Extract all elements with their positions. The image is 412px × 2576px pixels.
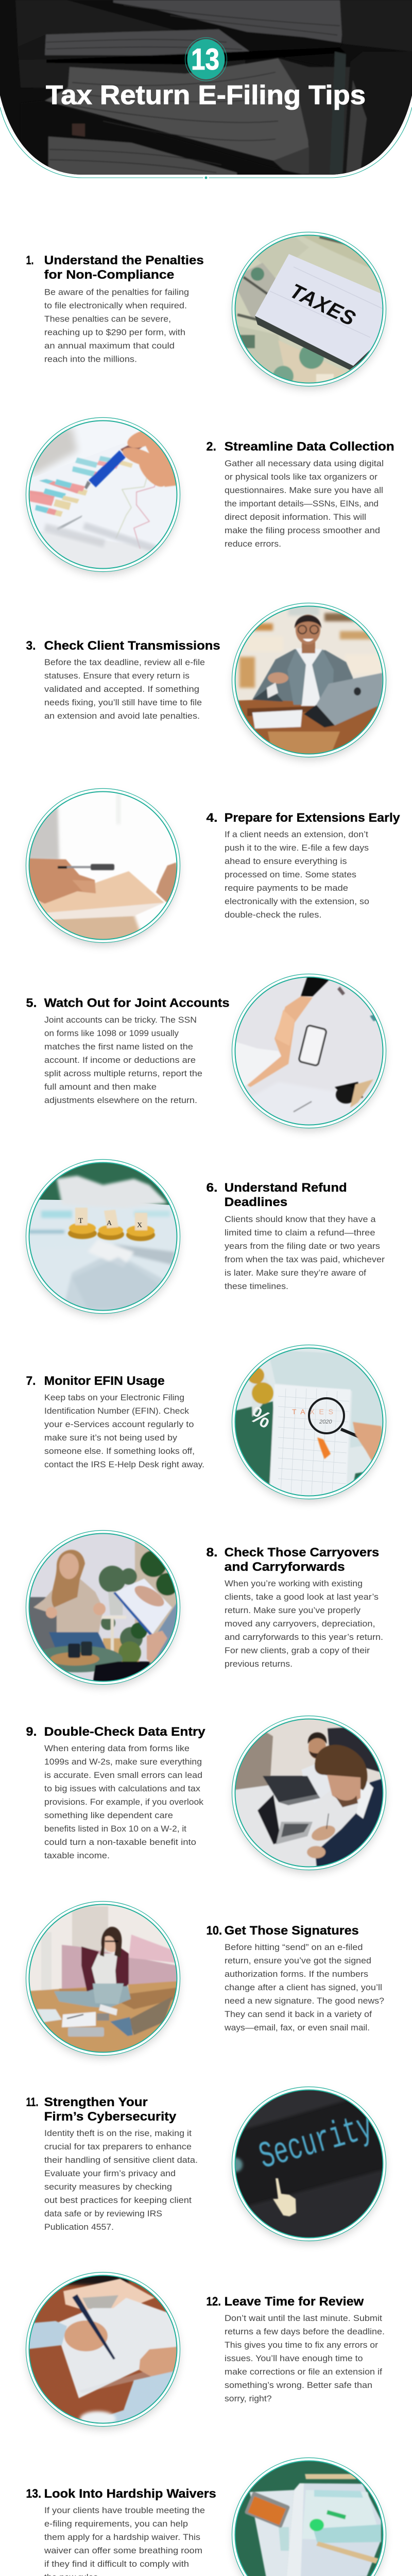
heading with number: Look Into Hardship Waivers: [44, 2487, 216, 2501]
body text: questionnaires. Make sure you have all: [225, 486, 383, 495]
jeans: [54, 1986, 131, 2008]
body text: limited time to claim a refund—three: [225, 1228, 375, 1238]
body text: [224, 1943, 384, 2032]
table: [238, 699, 378, 750]
heading with number: 4.: [206, 811, 217, 825]
heading with number: Check Those Carryovers: [225, 1546, 379, 1560]
heading with number: 3.: [26, 639, 36, 653]
body text: [225, 2314, 385, 2403]
laptop: [316, 673, 383, 725]
body text: [225, 830, 369, 920]
body text: taxable income.: [44, 1851, 110, 1860]
panel: tip 10: [26, 1901, 384, 2058]
body text: Before the tax deadline, review all e-file: [44, 658, 205, 667]
heading with number: and Carryforwards: [225, 1560, 345, 1574]
body text: If your clients have trouble meeting the: [44, 2506, 205, 2515]
header panel: [0, 0, 412, 180]
body text: Joint accounts can be tricky. The SSN: [44, 1015, 197, 1025]
body text: something like dependent care: [44, 1811, 173, 1820]
body text: For new clients, grab a copy of their: [225, 1646, 370, 1655]
photo: woman on floor with laptop: [26, 1901, 180, 2058]
body text: [44, 1744, 204, 1860]
body text: adjustments elsewhere on the return.: [44, 1096, 197, 1105]
body text: provisions. For example, if you overlook: [44, 1798, 204, 1807]
pen: [84, 481, 91, 489]
dark laptop: [263, 1776, 318, 1802]
front laptop: [258, 1794, 281, 1844]
photo: tax blocks on gold coins: [26, 1159, 180, 1316]
body text: the important details—SSNs, EINs, and: [225, 499, 379, 509]
jeans: [49, 1632, 106, 1651]
body text: change after a client has signed, you’ll: [225, 1983, 382, 1992]
photo: pen over bar charts: [26, 417, 185, 574]
body text: previous returns.: [225, 1659, 293, 1669]
heading with number: Get Those Signatures: [225, 1924, 359, 1938]
heading with number: 10.: [206, 1924, 222, 1938]
person in foreground: [93, 1623, 180, 1685]
body text: When entering data from forms like: [44, 1744, 190, 1753]
body text: [44, 287, 189, 364]
body text: These penalties can be severe,: [44, 314, 171, 324]
body text: processed on time. Some states: [225, 870, 356, 879]
body text: statuses. Ensure that every return is: [44, 671, 190, 681]
body text: full amount and then make: [44, 1082, 157, 1092]
body text: split across multiple returns, report the: [44, 1069, 202, 1078]
body text: [44, 2506, 205, 2576]
heading with number: 8.: [206, 1546, 217, 1560]
heading with number: for Non-Compliance: [44, 268, 174, 282]
photo: woman talking with clipboard note-taker: [26, 1530, 181, 1687]
photo: security on a screen with cursor: [228, 2087, 386, 2243]
body text: need a new signature. The good news?: [225, 1996, 384, 2006]
body text: clients, take a good look at last year’s: [225, 1592, 379, 1602]
panel: tip 7: [26, 1345, 386, 1501]
body text: Keep tabs on your Electronic Filing: [44, 1393, 184, 1402]
body text: and carryforwards to this year’s return.: [225, 1633, 383, 1642]
heading with number: 5.: [26, 996, 37, 1010]
body text: to file electronically when required.: [44, 301, 187, 310]
body text: push it to the wire. E-file a few days: [225, 843, 369, 853]
hand: [122, 431, 176, 487]
heading with number: Watch Out for Joint Accounts: [44, 996, 230, 1010]
desk items: [62, 2012, 96, 2027]
jacket: [33, 1579, 103, 1634]
paper: [252, 710, 302, 728]
panel: tip 1: [26, 232, 386, 388]
photo: smiling man at laptop: [232, 603, 386, 759]
body text: reach into the millions.: [44, 354, 137, 364]
heading with number: 11.: [26, 2095, 38, 2109]
photo: handshake over desk with phone: [232, 974, 386, 1130]
body text: double-check the rules.: [225, 910, 321, 920]
body text: [44, 1015, 202, 1105]
body text: something’s wrong. Better safe than: [225, 2381, 372, 2390]
panel: tip 13: [26, 2458, 386, 2576]
photo: taxes lightbox on dollar bills: [232, 232, 386, 388]
photo: magnifier over taxes notebook: [232, 1345, 386, 1501]
body text: [225, 459, 384, 549]
front man: [315, 1777, 386, 1870]
heading with number: 1.: [26, 253, 34, 267]
photo: tax blocks on gold coins: X: [137, 1222, 142, 1229]
body text: your e-Services account regularly to: [44, 1420, 194, 1429]
photo: hands passing pen and envelope: [26, 788, 180, 945]
body text: benefits listed in Box 10 on a W-2, it: [44, 1824, 186, 1834]
plants: [99, 1566, 143, 1650]
body text: ways—email, fax, or even snail mail.: [224, 2023, 370, 2032]
body text: crucial for tax preparers to enhance: [44, 2142, 192, 2151]
body text: an extension and avoid late penalties.: [44, 711, 200, 721]
panel: tip 4: [26, 788, 400, 945]
body text: Publication 4557.: [44, 2223, 114, 2232]
body text: them apply for a hardship waiver. This: [44, 2533, 200, 2542]
heading with number: 6.: [206, 1181, 217, 1195]
body text: years from the filing date or two years: [225, 1242, 380, 1251]
body text: if they find it difficult to comply with: [44, 2560, 189, 2569]
body text: waiver can offer some breathing room: [44, 2546, 202, 2555]
heading with number: [206, 1181, 347, 1209]
body text: moved any carryovers, depreciation,: [225, 1619, 375, 1629]
body text: make corrections or file an extension if: [225, 2367, 382, 2377]
body text: direct deposit information. This will: [225, 513, 366, 522]
body text: return, ensure you’ve got the signed: [225, 1956, 371, 1965]
heading with number: 2.: [206, 440, 216, 453]
heading with number: [26, 2095, 177, 2124]
back man: [301, 1759, 345, 1803]
body text: issues. You’ll have enough time to: [225, 2354, 363, 2363]
hands: [46, 1607, 57, 1618]
body text: reduce errors.: [225, 539, 281, 549]
body text: If a client needs an extension, don’t: [225, 830, 368, 839]
header photo: stacked binders: [0, 0, 412, 178]
photo: taxes lightbox on dollar bills: TAXES: [286, 280, 359, 330]
panel: tip 3: [26, 603, 386, 759]
photo: hand signing a form: [26, 2272, 180, 2429]
body text: from when the tax was paid, whichever: [225, 1255, 385, 1264]
panel: tip 9: [26, 1716, 386, 1872]
body text: electronically with the extension, so: [225, 897, 369, 906]
body text: 1099s and W-2s, make sure everything: [44, 1757, 202, 1767]
heading with number: Firm’s Cybersecurity: [44, 2110, 177, 2124]
body text: matches the first name listed on the: [44, 1042, 193, 1052]
body text: could turn a non-taxable benefit into: [44, 1838, 196, 1847]
number badge: 13: [185, 38, 227, 81]
number badge: 13: 13: [191, 43, 219, 76]
hair + head: [52, 1550, 85, 1607]
body text: someone else. If something looks off,: [44, 1447, 195, 1456]
photo: magnifier over taxes notebook: 2020: [319, 1419, 332, 1425]
body text: data safe or by reviewing IRS: [44, 2209, 162, 2218]
laptop: [129, 1996, 173, 2035]
heading with number: 12.: [206, 2295, 221, 2309]
heading with number: Prepare for Extensions Early: [225, 811, 400, 825]
panel: tip 5: [26, 974, 386, 1130]
body text: When you’re working with existing: [225, 1579, 363, 1588]
body text: authorization forms. If the numbers: [225, 1970, 368, 1979]
panel: tip 11: [26, 2087, 386, 2243]
head: [103, 1930, 121, 1952]
head: [302, 639, 315, 653]
body text: return. Make sure you’ve properly: [225, 1606, 361, 1615]
body text: or physical tools like tax organizers or: [225, 472, 378, 482]
heading with number: [206, 1546, 379, 1574]
sweater and tee: [81, 1953, 129, 1994]
body text: contact the IRS E-Help Desk right away.: [44, 1460, 204, 1469]
body text: Don’t wait until the last minute. Submit: [225, 2314, 382, 2323]
body text: Identification Number (EFIN). Check: [44, 1406, 190, 1416]
photo: tax forms and calculator on green: [232, 2458, 386, 2576]
body text: to big issues with calculations and tax: [44, 1784, 201, 1793]
body text: e-filing requirements, you can help: [44, 2519, 188, 2529]
body text: Evaluate your firm’s privacy and: [44, 2169, 176, 2178]
body text: [225, 1579, 383, 1669]
body text: This gives you time to fix any errors or: [225, 2341, 379, 2350]
heading with number: Monitor EFIN Usage: [44, 1374, 165, 1388]
photo: tax blocks on gold coins: T: [78, 1217, 83, 1225]
body text: Gather all necessary data using digital: [225, 459, 384, 468]
photo: magnifier over taxes notebook: TAXES: [292, 1408, 333, 1416]
body text: [44, 658, 205, 721]
heading with number: 9.: [26, 1725, 37, 1739]
heading with number: Understand the Penalties: [44, 253, 204, 267]
body text: sorry, right?: [225, 2394, 272, 2403]
heading with number: 7.: [26, 1374, 36, 1388]
heading with number: Deadlines: [225, 1195, 287, 1209]
header outline with centre dot: [0, 107, 412, 180]
panel: tip 12: [26, 2272, 385, 2429]
body text: They can send it back in a variety of: [225, 2010, 372, 2019]
panel: tip 8: [26, 1530, 383, 1687]
panel: tip 6: [26, 1159, 385, 1316]
heading with number: Leave Time for Review: [225, 2295, 364, 2309]
body text: an annual maximum that could: [44, 341, 175, 350]
hand: [268, 672, 288, 684]
body text: out best practices for keeping client: [44, 2196, 192, 2205]
heading with number: 13.: [26, 2487, 41, 2501]
body text: make sure it’s not being used by: [44, 1433, 178, 1443]
heading with number: Strengthen Your: [44, 2095, 148, 2109]
body text: reaching up to $290 per form, with: [44, 328, 185, 337]
body text: make the filing process smoother and: [225, 526, 380, 535]
body text: Be aware of the penalties for failing: [44, 287, 189, 297]
body text: needs fixing, you’ll still have time to file: [44, 698, 202, 707]
body text: Before hitting “send” on an e-filed: [225, 1943, 363, 1952]
panel: tip 2: [26, 417, 394, 574]
heading with number: Double-Check Data Entry: [44, 1725, 205, 1739]
body text: Identity theft is on the rise, making it: [44, 2129, 192, 2138]
body text: is accurate. Even small errors can lead: [44, 1771, 202, 1780]
photo: magnifier over taxes notebook: %: [246, 1402, 276, 1433]
photo: colleagues working at laptops: [232, 1716, 386, 1872]
body text: these timelines.: [225, 1282, 288, 1291]
body text: validated and accepted. If something: [44, 685, 199, 694]
heading with number: Streamline Data Collection: [225, 440, 394, 453]
body text: [44, 1393, 204, 1469]
body text: [44, 2129, 198, 2232]
body text: their handling of sensitive client data.: [44, 2156, 198, 2165]
shirt: [296, 648, 322, 706]
table + cups: [32, 1646, 123, 1672]
body text: require payments to be made: [225, 884, 348, 893]
heading with number: Check Client Transmissions: [44, 639, 220, 653]
body text: on forms like 1098 or 1099 usually: [44, 1029, 179, 1038]
body text: account. If income or deductions are: [44, 1056, 196, 1065]
body text: Clients should know that they have a: [225, 1215, 376, 1224]
heading with number: Understand Refund: [225, 1181, 347, 1195]
body text: returns a few days before the deadline.: [225, 2327, 385, 2336]
jacket: [252, 649, 355, 703]
body text: [225, 1215, 385, 1291]
body text: ahead to ensure everything is: [225, 857, 347, 866]
photo: tax blocks on gold coins: A: [107, 1219, 112, 1227]
title: Tax Return E-Filing Tips: [46, 80, 366, 110]
heading with number: [26, 253, 204, 282]
body text: security measures by checking: [44, 2182, 172, 2192]
body text: is later. Make sure they’re aware of: [225, 1268, 366, 1278]
